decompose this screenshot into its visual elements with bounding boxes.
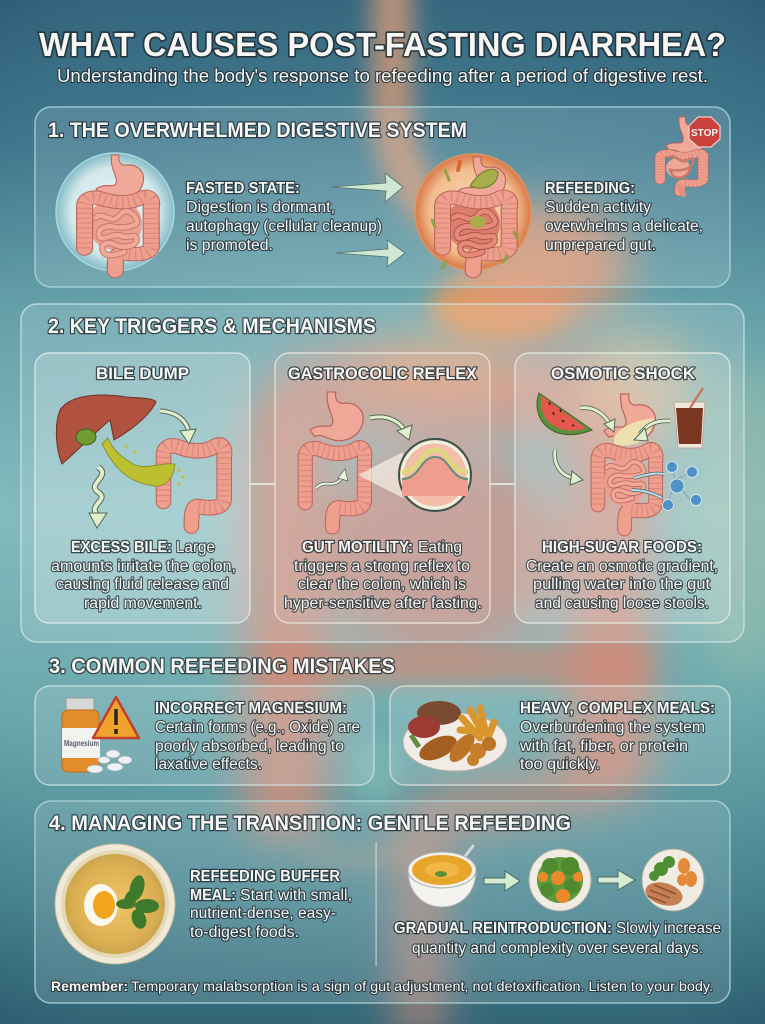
refeeding text: unprepared gut.: [545, 237, 656, 254]
fasted state text: FASTED STATE:: [186, 180, 300, 197]
card text: HIGH-SUGAR FOODS:: [542, 539, 702, 556]
card heading: GASTROCOLIC REFLEX: [288, 364, 478, 383]
card text: hyper-sensitive after fasting.: [284, 595, 482, 612]
connector left: [250, 483, 275, 485]
card text: HEAVY, COMPLEX MEALS:: [520, 700, 715, 717]
icon: gallbladder: [76, 429, 96, 445]
divider: [376, 842, 377, 966]
icon: magnesium bottle, warning and pills: [62, 697, 139, 773]
connector right: [490, 483, 515, 485]
card text: [526, 539, 718, 612]
card: incorrect magnesium: [35, 686, 374, 785]
card text: rapid movement.: [84, 595, 202, 612]
icon: colon: [163, 445, 225, 526]
icon: colon and small intestine: [598, 450, 656, 529]
arrow top: [331, 173, 403, 202]
icon: colon: [305, 448, 365, 527]
icon: watermelon: [537, 393, 592, 435]
icon: broth bowl with egg and parsley: [55, 844, 175, 964]
icon: magnesium bottle, warning and pills: Magnesium: [64, 739, 99, 748]
gradual reintroduction text: GRADUAL REINTRODUCTION:: [394, 920, 612, 937]
card text: laxative effects.: [155, 756, 262, 773]
card text: amounts irritate the colon,: [51, 558, 236, 575]
panel 2: key triggers and mechanisms: [21, 304, 744, 642]
icon: stomach with stop sign: STOP: [691, 128, 718, 139]
fasted state text: Digestion is dormant,: [186, 199, 335, 216]
gradual reintroduction text: [394, 920, 721, 957]
fasted state text: [186, 180, 382, 254]
card text: [284, 539, 482, 612]
arrow: motility inside colon: [316, 469, 348, 488]
icon: refeeding inflamed intestines in a circle: [415, 154, 531, 271]
card background: [390, 686, 730, 785]
card heading: OSMOTIC SHOCK: [551, 364, 696, 383]
card background: [35, 353, 250, 623]
gradual reintroduction text: Slowly increase: [616, 920, 721, 937]
arrows: water and sugar flow: [555, 408, 670, 498]
icon: stomach with stop sign: [660, 117, 720, 194]
icon: vegetable plate: [529, 849, 591, 911]
refeeding text: overwhelms a delicate,: [545, 218, 703, 235]
reminder note: Temporary malabsorption is a sign of gut adjustment, not detoxification. Listen to your body.: [131, 978, 713, 994]
card text: Eating: [418, 539, 462, 556]
arrow: curved to colon: [160, 411, 196, 444]
buffer meal text: [190, 868, 352, 941]
gradual reintroduction text: quantity and complexity over several days.: [412, 940, 703, 957]
card: bile dump: [35, 353, 250, 623]
icon: stomach: [310, 392, 363, 441]
buffer meal text: REFEEDING BUFFER: [190, 868, 340, 885]
icon: sugar molecules: [662, 462, 702, 510]
card text: pulling water into the gut: [533, 576, 711, 593]
arrow: vegetables to protein: [598, 870, 635, 890]
card text: poorly absorbed, leading to: [155, 738, 344, 755]
reminder note: Remember:: [51, 978, 128, 994]
icon: fasted intestines in a circle: [56, 153, 174, 271]
icon: stomach with sugar: [604, 394, 655, 445]
card text: and causing loose stools.: [535, 595, 709, 612]
arrow: to magnifier: [370, 417, 412, 440]
icon: zoom beam: [358, 452, 403, 498]
icon: heavy food plate: [403, 701, 507, 771]
card text: [155, 700, 360, 773]
icon: soda glass: [674, 388, 705, 448]
panel 4: managing the transition: [35, 801, 730, 1003]
refeeding text: Sudden activity: [545, 199, 651, 216]
card text: too quickly.: [520, 756, 600, 773]
refeeding text: [545, 180, 703, 254]
icon: protein plate: [642, 849, 704, 911]
card text: [519, 700, 715, 773]
panel background: [35, 801, 730, 1003]
panel background: [21, 304, 744, 642]
buffer meal text: Start with small,: [240, 887, 352, 904]
buffer meal text: nutrient-dense, easy-: [190, 905, 336, 922]
heading 1: 1. THE OVERWHELMED DIGESTIVE SYSTEM: [48, 118, 467, 142]
card: osmotic shock: [515, 353, 730, 623]
card: gastrocolic reflex: [275, 353, 490, 623]
card text: Create an osmotic gradient,: [526, 558, 718, 575]
heading 2: 2. KEY TRIGGERS & MECHANISMS: [48, 314, 376, 338]
buffer meal text: MEAL:: [190, 887, 236, 904]
icon: liver: [56, 395, 156, 464]
card text: triggers a strong reflex to: [294, 558, 470, 575]
icon: bile stream: [102, 438, 175, 486]
fasted state text: is promoted.: [186, 237, 273, 254]
card heading: BILE DUMP: [96, 364, 189, 383]
buffer meal text: to-digest foods.: [190, 924, 299, 941]
card text: Overburdening the system: [520, 719, 705, 736]
card: heavy complex meals: [390, 686, 730, 785]
title: WHAT CAUSES POST-FASTING DIARRHEA?: [39, 26, 726, 63]
card text: Certain forms (e.g., Oxide) are: [155, 719, 360, 736]
card text: with fat, fiber, or protein: [519, 738, 688, 755]
arrow bottom: [335, 240, 405, 267]
card text: EXCESS BILE:: [71, 539, 172, 556]
card text: causing fluid release and: [56, 576, 229, 593]
card text: clear the colon, which is: [298, 576, 466, 593]
card text: [51, 539, 236, 612]
card text: Large: [176, 539, 215, 556]
heading 4: 4. MANAGING THE TRANSITION: GENTLE REFEEDING: [49, 811, 571, 835]
refeeding text: REFEEDING:: [545, 180, 635, 197]
icon: bile droplets: [126, 446, 183, 484]
card background: [275, 353, 490, 623]
panel background: [35, 107, 730, 287]
subtitle: Understanding the body's response to refeeding after a period of digestive rest.: [57, 66, 708, 86]
panel 1: the overwhelmed digestive system: [35, 107, 730, 287]
card text: INCORRECT MAGNESIUM:: [155, 700, 347, 717]
icon: soup bowl: [408, 846, 476, 907]
icon: magnified gut wall: [399, 439, 471, 511]
arrow: soup to vegetables: [484, 871, 520, 891]
fasted state text: autophagy (cellular cleanup): [186, 218, 382, 235]
card background: [35, 686, 374, 785]
card background: [515, 353, 730, 623]
arrow: wavy down: [89, 467, 107, 528]
card text: GUT MOTILITY:: [302, 539, 413, 556]
heading 3: 3. COMMON REFEEDING MISTAKES: [49, 654, 395, 678]
